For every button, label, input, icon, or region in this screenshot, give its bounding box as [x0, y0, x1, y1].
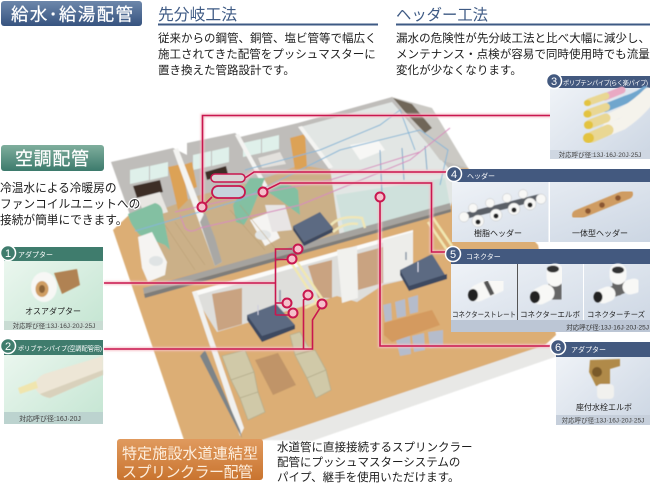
lower room walls: [192, 230, 413, 332]
text: sprinkler description: パイプ、継手を使用いただけます。: [277, 470, 460, 484]
fan coil unit upper: [293, 212, 333, 246]
panel 1: adapter: アダプター: [18, 250, 53, 259]
icon: insulated pipe: [18, 356, 103, 398]
windows: [130, 135, 279, 184]
panel 4: header: 樹脂ヘッダー: [474, 228, 522, 238]
heading: sprinkler piping: 特定施設水道連結型: [122, 446, 258, 462]
panel 5: connector: コネクターストレート: [452, 310, 516, 319]
heading: air conditioning piping: [1, 145, 104, 171]
text: header method description: 変化が少なくなります。: [396, 63, 522, 77]
panel 1: adapter: [0, 246, 103, 330]
text: header method description: 漏水の危険性が先分岐工法と比べ大幅に減少し、: [396, 31, 650, 45]
panel 1: adapter: 対応呼び径:13J·16J·20J·25J: [13, 321, 95, 330]
icon: tee connector: [594, 266, 634, 302]
wash basins: [138, 205, 292, 282]
text: air conditioning description: 冷温水による冷暖房の: [0, 181, 117, 195]
heading: water supply piping: 給水･給湯配管: [11, 4, 133, 24]
panel 4: header: 4: [451, 169, 457, 181]
upper floor: bedrooms: [130, 168, 340, 283]
panel 5: connector: [446, 246, 650, 332]
building cutaway illustration: [111, 97, 575, 441]
sofas: [222, 332, 331, 420]
bathtub: [350, 140, 385, 160]
panel 2: polybutene pipe for air conditioning: 対応呼び径:16J·20J: [19, 414, 81, 423]
heading: air conditioning piping: 空調配管: [15, 149, 89, 169]
connection line: adapter 1: [104, 244, 302, 318]
connection line: header 4: [245, 172, 447, 178]
connection line: polybutene pipe 3: [198, 116, 551, 212]
heading: water supply piping: [1, 1, 142, 26]
wood floor planks: [165, 205, 275, 270]
cream pipes lower: [292, 262, 323, 308]
text: header method description: メンテナンス・点検が容易で同時使用時でも流量: [396, 47, 650, 61]
water pipes: blue and pink: [135, 110, 450, 231]
cream pipes right: [428, 218, 452, 250]
coffee table: [255, 353, 296, 395]
text: air conditioning description: 接続が簡単にできます。: [0, 213, 127, 227]
text: branch method description: 施工されてきた配管をプッシュマスターに: [158, 47, 376, 61]
panel 5: connector: 5: [450, 249, 456, 261]
panel 4: header: 一体型ヘッダー: [572, 228, 628, 238]
icon: straight connector: [468, 283, 500, 301]
outer wood floor: [113, 97, 556, 440]
panel 2: polybutene pipe for air conditioning: [0, 338, 103, 424]
beds: [133, 152, 286, 218]
heading: sprinkler piping: [117, 439, 263, 481]
panel 3: polybutene pipe: [546, 74, 650, 159]
panel 4: header: [446, 166, 650, 242]
panel 6: adapter: 6: [555, 342, 561, 354]
green partitions: [128, 178, 300, 250]
connection line: adapter 6: [376, 192, 553, 346]
connection lines halo: [104, 116, 553, 349]
icon: elbow connector: [530, 266, 559, 303]
panel 5: connector: コネクターエルボ: [520, 310, 581, 319]
icon: male adapter: [31, 269, 80, 302]
panel 3: polybutene pipe: 対応呼び径:13J·16J·20J·25J: [559, 150, 641, 159]
fan coil unit left: [247, 290, 295, 342]
icon: coloured pipes: [587, 90, 650, 138]
heading: header method: ヘッダー工法: [396, 6, 488, 24]
fan coil unit right: [400, 252, 447, 291]
panel 4: header: ヘッダー: [467, 172, 495, 180]
icon: one-piece header: [577, 194, 628, 215]
panel 5: connector: 対応呼び径:13J·16J·20J·25J: [566, 322, 649, 332]
panel 3: polybutene pipe: 3: [551, 76, 557, 88]
icon: wall elbow fitting: [589, 359, 620, 399]
panel 5: connector: コネクター: [466, 252, 501, 261]
panel 5: connector: コネクターチーズ: [587, 310, 646, 319]
text: sprinkler description: 配管にプッシュマスターシステムの: [277, 455, 460, 469]
panel 6: adapter: 対応呼び径:13J·16J·20J·25J: [562, 416, 644, 424]
panel 6: adapter: 座付水栓エルボ: [576, 402, 632, 412]
cream pipes upper: [331, 217, 365, 232]
upper walls: [111, 97, 468, 215]
text: air conditioning description: ファンコイルユニットへの: [0, 198, 140, 211]
beam between floors: [143, 203, 451, 298]
panel 1: adapter: 1: [5, 248, 11, 260]
connection line: polybutene pipe 2: [104, 290, 326, 349]
panel 6: adapter: [550, 340, 650, 425]
panel 1: adapter: オスアダプター: [25, 306, 81, 316]
heading: sprinkler piping: スプリンクラー配管: [122, 463, 253, 481]
panel 2: polybutene pipe for air conditioning: 2: [5, 341, 11, 353]
text: branch method description: 置き換えた管路設計です。: [158, 63, 295, 77]
glass side wall: [192, 292, 244, 438]
icon: resin header: [459, 190, 546, 227]
dining set: [383, 295, 443, 356]
panel 2: polybutene pipe for air conditioning: ポリブテンパイプ(空調配管用): [18, 344, 102, 352]
room dividing walls: [173, 126, 333, 266]
text: sprinkler description: 水道管に直接接続するスプリンクラー: [277, 440, 472, 454]
bathroom area: [300, 102, 464, 238]
connection line: connector 5: [258, 183, 448, 252]
wardrobes: [168, 134, 307, 210]
text: branch method description: 従来からの鋼管、銅管、塩ビ管等で幅広く: [158, 31, 376, 45]
panel 6: adapter: アダプター: [571, 345, 606, 354]
floor slab edge: [262, 344, 575, 441]
roof equipment: [393, 98, 432, 133]
heading: branch method: 先分岐工法: [158, 6, 237, 24]
panel 3: polybutene pipe: ポリブテンパイプ(らく楽パイプ): [563, 78, 648, 87]
